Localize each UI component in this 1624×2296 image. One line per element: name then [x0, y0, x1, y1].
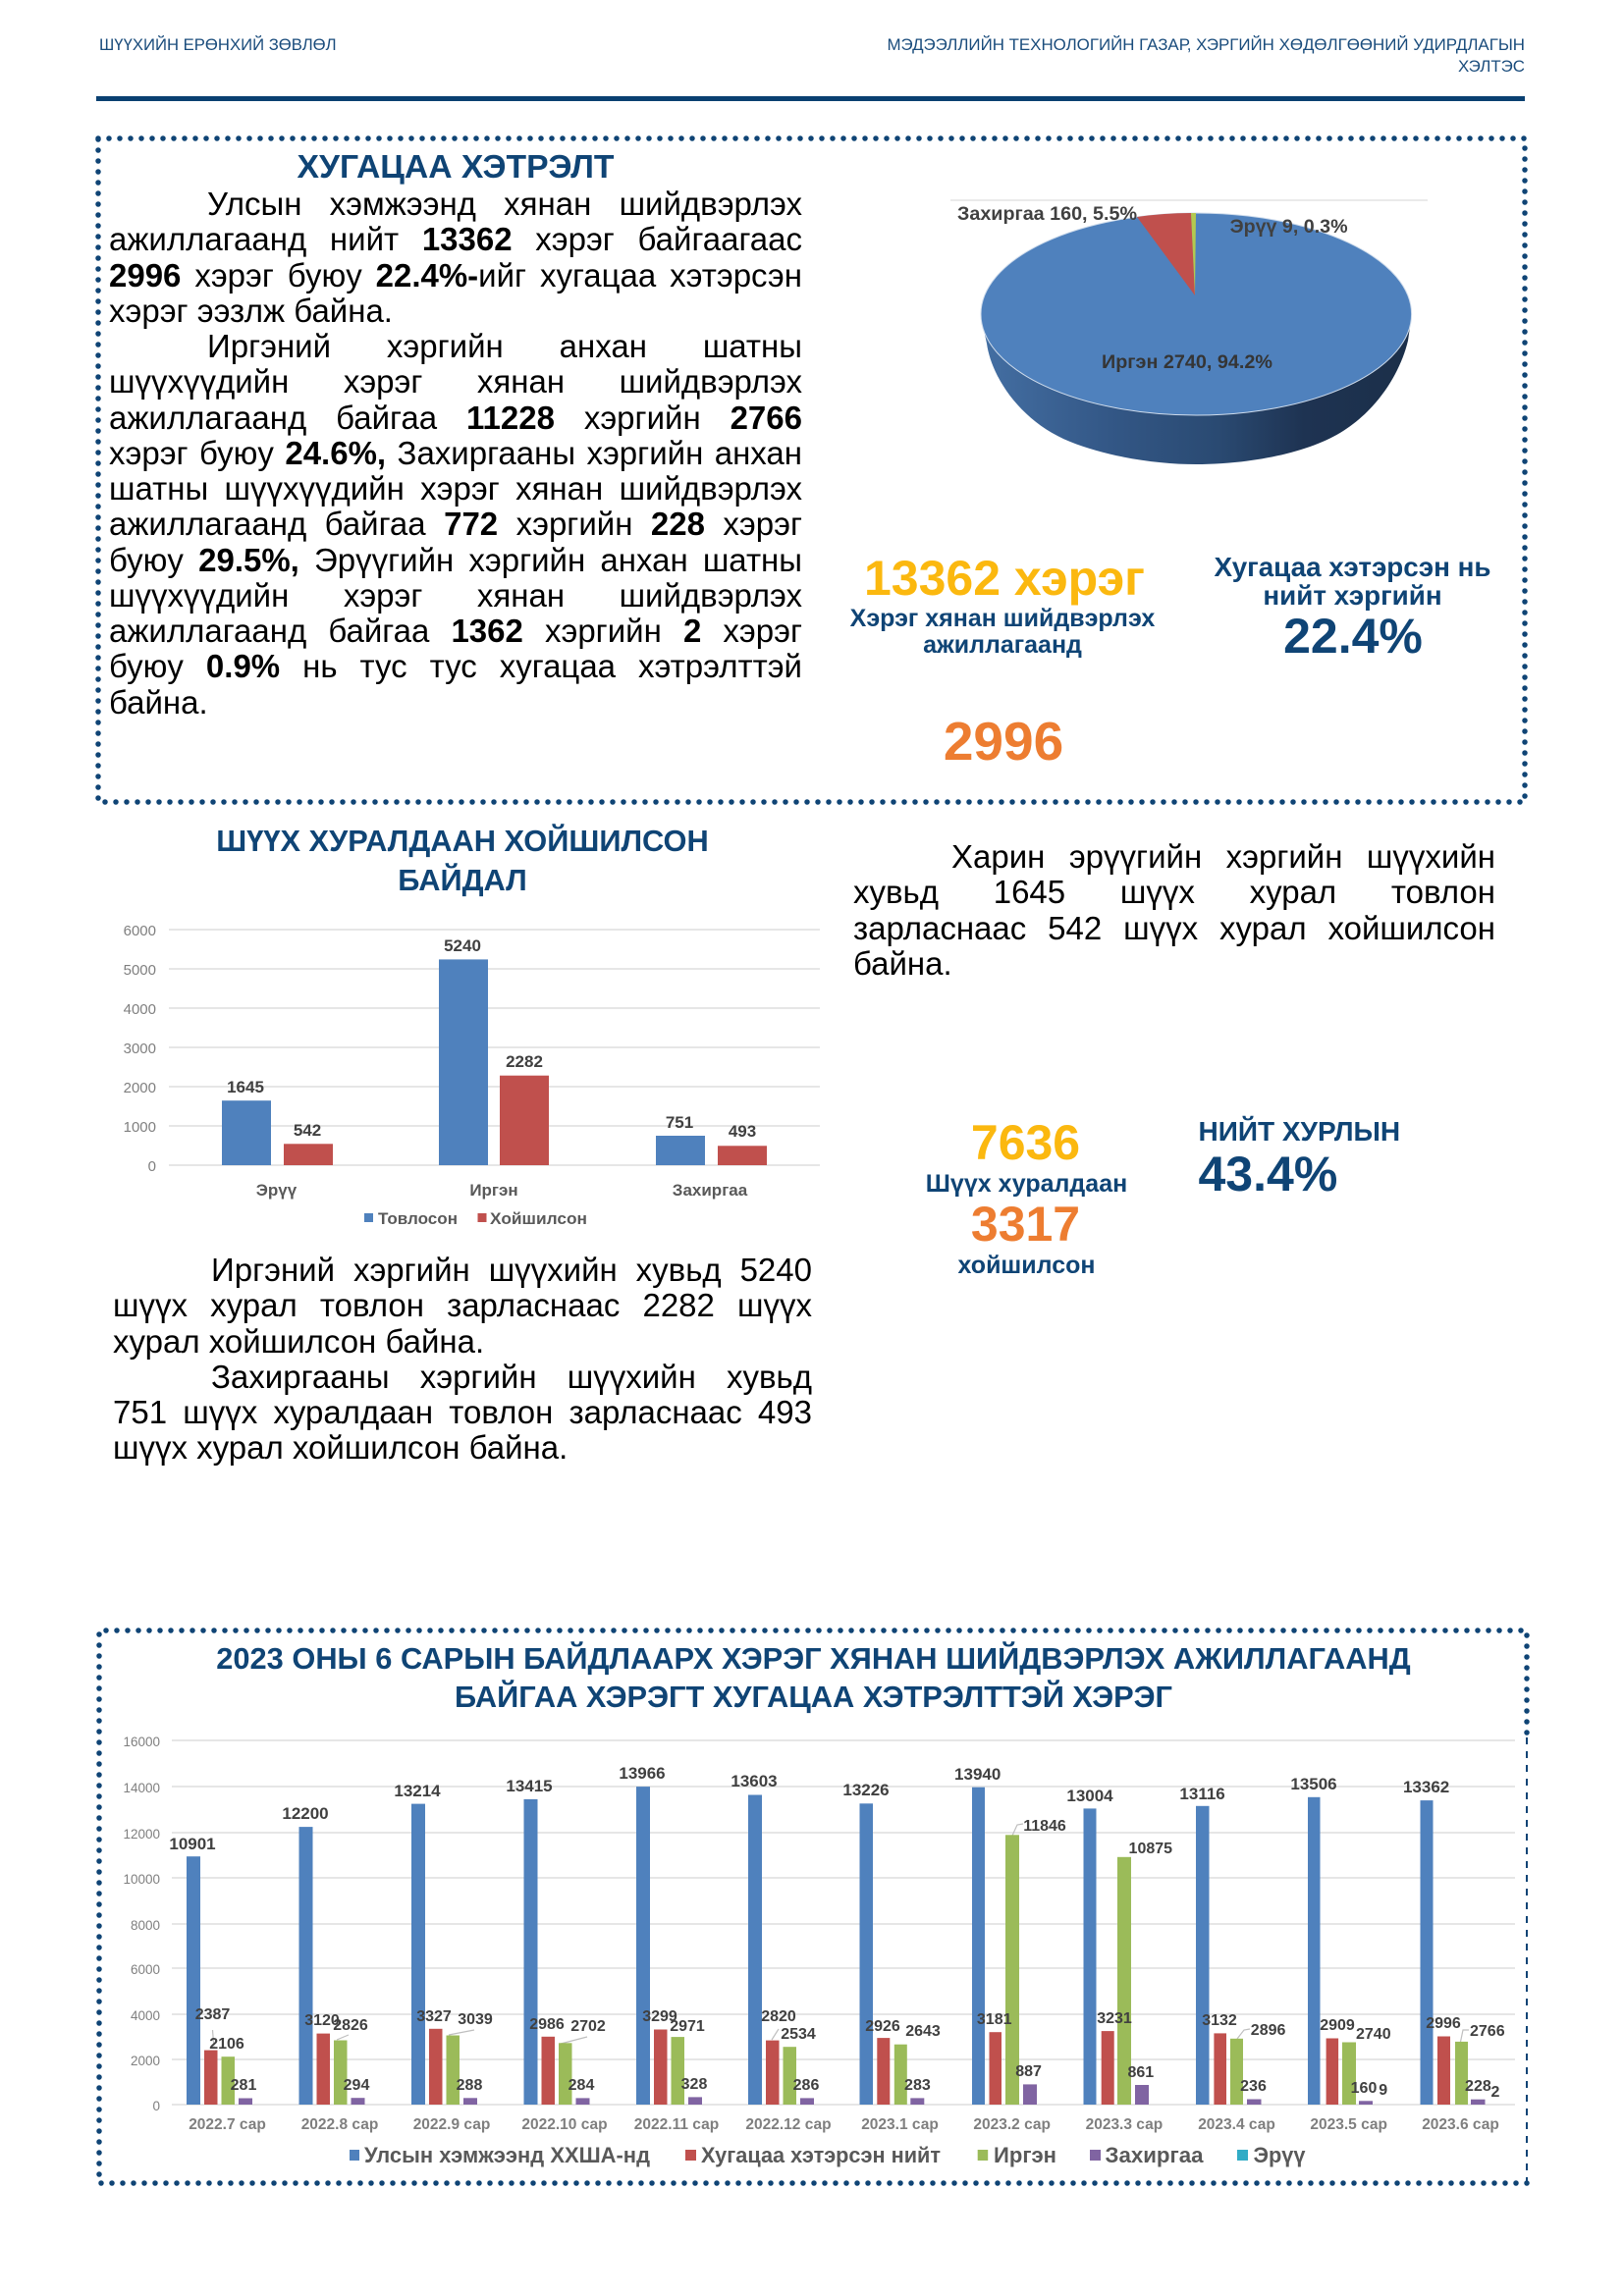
month: 2023.3: 10875: [1129, 1841, 1172, 1857]
month: 2023.5: [1290, 1775, 1391, 2133]
text block: criminal hearings: байна.: [853, 945, 952, 982]
month: 2022.11: 328: [681, 2076, 707, 2093]
bars: administrative: 751: [666, 1113, 693, 1132]
stat caption: overdue share: [1214, 552, 1490, 611]
y axis labels: 6000: [131, 1962, 160, 1977]
month: 2022.10: [506, 1777, 608, 2133]
text block: overdue description: шүүхүүдийн хэрэг хянан шийдвэрлэх: [109, 363, 802, 400]
month: 2022.9: 2022.9 сар: [413, 2116, 490, 2133]
header rule: [96, 96, 1525, 101]
month: 2022.11: 2022.11 сар: [634, 2116, 719, 2133]
panel: overdue cases: [95, 135, 1528, 805]
text block: overdue description: буюу 0.9% нь тус тус хугацаа хэтрэлттэй: [109, 648, 802, 684]
month: 2023.4: 13116: [1179, 1785, 1225, 1803]
month: 2023.2: 2023.2 сар: [973, 2116, 1051, 2133]
text block: criminal hearings: Харин эрүүгийн хэргийн шүүхийн: [951, 838, 1495, 875]
legend: Хойшилсон: [490, 1209, 587, 1228]
month: 2023.4: 2023.4 сар: [1198, 2116, 1275, 2133]
text block: overdue description: ажиллагаанд байгаа 1362 хэргийн 2 хэрэг: [109, 613, 802, 649]
text block: overdue description: ажиллагаанд нийт 13362 хэрэг байгаагаас: [109, 221, 802, 257]
text block: overdue description: Иргэний хэргийн анхан шатны: [207, 328, 802, 364]
month: 2022.9: 3327: [416, 2008, 452, 2025]
stat caption: overdue share: Хугацаа хэтэрсэн нь: [1215, 552, 1490, 581]
month: 2022.10: 2022.10 сар: [521, 2116, 608, 2133]
stat caption: overdue share: нийт хэргийн: [1263, 579, 1442, 611]
month: 2022.9: 3039: [458, 2011, 493, 2028]
text block: civil and administrative hearings: Иргэний хэргийн шүүхийн хувьд 5240: [211, 1252, 812, 1288]
month: 2022.11: 13966: [619, 1764, 666, 1783]
stat caption: total cases: Хэрэг хянан шийдвэрлэх: [850, 605, 1155, 632]
stat caption: total hearings: НИЙТ ХУРЛЫН: [1198, 1116, 1400, 1147]
bars: civil: 5240: [444, 936, 481, 955]
leader lines: [212, 1824, 1469, 2049]
y axis labels: 14000: [123, 1781, 160, 1795]
text block: civil and administrative hearings: шүүх хурал товлон зарласнаас 2282 шүүх: [113, 1287, 812, 1323]
month: 2023.6: 2766: [1470, 2023, 1505, 2040]
text block: overdue description: буюу 29.5%, Эрүүгийн хэргийн анхан шатны: [109, 542, 802, 577]
bars: civil: Иргэн: [469, 1181, 518, 1200]
bars: criminal: [222, 1078, 333, 1200]
bars: criminal: 1645: [227, 1078, 264, 1096]
legend: Захиргаа: [1106, 2143, 1204, 2167]
month: 2023.4: 3132: [1202, 2012, 1237, 2029]
legend: Иргэн: [994, 2143, 1056, 2167]
bars: administrative: Захиргаа: [673, 1181, 748, 1200]
text block: criminal hearings: хувьд 1645 шүүх хурал товлон: [853, 874, 1495, 910]
month: 2022.10: 13415: [506, 1777, 553, 1795]
month: 2022.8: 294: [344, 2077, 369, 2094]
month: 2022.12: 286: [793, 2077, 819, 2094]
y axis labels: 5000: [124, 962, 156, 979]
month: 2022.10: 284: [568, 2077, 594, 2094]
month: 2023.6: [1403, 1778, 1505, 2133]
y axis labels: 0: [152, 2099, 160, 2113]
bars: civil: 2282: [506, 1052, 543, 1071]
heading: overdue: ХУГАЦАА ХЭТРЭЛТ: [298, 148, 614, 186]
month: 2022.8: 2022.8 сар: [301, 2116, 378, 2133]
legend: Улсын хэмжээнд ХХША-нд: [364, 2143, 650, 2167]
stat: total cases: 13362 хэрэг: [864, 550, 1145, 605]
header: organisation name: ШҮҮХИЙН ЕРӨНХИЙ ЗӨВЛӨЛ: [99, 35, 337, 54]
text block: overdue description: 2996 хэрэг буюу 22.4%-ийг хугацаа хэтэрсэн: [109, 257, 802, 293]
month: 2022.10: 2986: [529, 2016, 565, 2033]
month: 2022.7: 2022.7 сар: [189, 2116, 266, 2133]
stat caption: total cases: [850, 605, 1155, 658]
text block: civil and administrative hearings: 751 шүүх хуралдаан товлон зарласнаас 493: [113, 1394, 812, 1430]
pie label: civil: Иргэн 2740, 94.2%: [1102, 352, 1272, 373]
y axis labels: 2000: [124, 1080, 156, 1096]
heading: monthly overdue trend: БАЙГАА ХЭРЭГТ ХУГАЦАА ХЭТРЭЛТТЭЙ ХЭРЭГ: [455, 1679, 1172, 1714]
bars: administrative: [656, 1113, 767, 1200]
month: 2022.9: 288: [457, 2077, 482, 2094]
month: 2023.1: 2643: [905, 2023, 941, 2040]
month: 2023.1: 2926: [865, 2018, 900, 2035]
month: 2023.5: 2023.5 сар: [1310, 2116, 1387, 2133]
month: 2023.4: [1179, 1785, 1285, 2133]
legend: Эрүү: [1253, 2143, 1306, 2167]
text block: overdue description: хэрэг ээзлж байна.: [109, 293, 393, 329]
header: department name: МЭДЭЭЛЛИЙН ТЕХНОЛОГИЙН ГАЗАР, ХЭРГИЙН ХӨДӨЛГӨӨНИЙ УДИРДЛАГЫН ХЭЛТЭС: [887, 35, 1525, 76]
month: 2023.6: 2996: [1426, 2015, 1461, 2032]
stat caption: scheduled hearings: Шүүх хуралдаан: [926, 1170, 1127, 1198]
text block: overdue description: шатны шүүхүүдийн хэрэг хянан шийдвэрлэх: [109, 470, 802, 507]
y axis labels: 0: [148, 1158, 156, 1175]
text block: criminal hearings: [853, 838, 1495, 982]
month: 2022.12: 2534: [781, 2026, 816, 2043]
month: 2023.3: [1066, 1787, 1172, 2133]
bar chart: scheduled vs postponed hearings: [124, 923, 820, 1228]
bar chart: monthly overdue cases: [123, 1735, 1515, 2167]
text block: civil and administrative hearings: Захиргааны хэргийн шүүхийн хувьд: [211, 1359, 812, 1395]
month: 2023.6: 228: [1465, 2078, 1491, 2095]
y axis labels: 4000: [131, 2008, 160, 2023]
month: 2022.7: 281: [231, 2077, 256, 2094]
heading: monthly overdue trend: [216, 1641, 1411, 1714]
month: 2022.12: 13603: [731, 1772, 778, 1790]
legend: [350, 2143, 1306, 2167]
bars: administrative: 493: [729, 1122, 756, 1141]
month: 2023.1: 283: [904, 2077, 931, 2094]
month: 2022.7: 2106: [209, 2036, 244, 2053]
month: 2022.12: 2820: [761, 2008, 796, 2025]
text block: overdue description: ажиллагаанд байгаа 772 хэргийн 228 хэрэг: [109, 506, 802, 542]
y axis labels: 4000: [124, 1001, 156, 1018]
month: 2022.11: 2971: [670, 2018, 705, 2035]
stat caption: total cases: ажиллагаанд: [923, 630, 1082, 658]
month: 2023.4: 236: [1240, 2078, 1267, 2095]
month: 2023.6: 2: [1491, 2084, 1500, 2101]
stat: scheduled hearings: 7636: [971, 1115, 1080, 1170]
stat: overdue share: 22.4%: [1283, 609, 1423, 664]
text block: overdue description: ажиллагаанд байгаа 11228 хэргийн 2766: [109, 399, 802, 436]
y axis labels: 16000: [123, 1735, 160, 1749]
month: 2022.8: 3120: [304, 2012, 340, 2029]
y axis labels: 12000: [123, 1827, 160, 1842]
month: 2023.5: 2909: [1320, 2017, 1355, 2034]
month: 2022.12: [731, 1772, 832, 2133]
month: 2023.5: 2740: [1356, 2026, 1391, 2043]
stat: postponed hearings: 3317: [971, 1196, 1080, 1251]
pie label: criminal: Эрүү 9, 0.3%: [1230, 217, 1348, 238]
month: 2022.7: 2387: [195, 2006, 230, 2023]
month: 2023.3: 2023.3 сар: [1086, 2116, 1163, 2133]
month: 2023.4: 2896: [1251, 2022, 1285, 2039]
month: 2023.2: 11846: [1023, 1818, 1066, 1835]
month: 2023.6: 13362: [1403, 1778, 1449, 1796]
month: 2022.7: 10901: [169, 1835, 216, 1853]
month: 2022.8: 2826: [333, 2017, 368, 2034]
y axis labels: 2000: [131, 2054, 160, 2068]
text block: overdue description: шүүхүүдийн хэрэг хянан шийдвэрлэх: [109, 577, 802, 614]
bars: criminal: Эрүү: [256, 1181, 298, 1200]
text block: civil and administrative hearings: шүүх хурал хойшилсон байна.: [113, 1429, 568, 1466]
month: 2022.9: 13214: [394, 1782, 441, 1800]
month: 2023.2: 3181: [977, 2011, 1012, 2028]
y axis labels: [124, 923, 156, 1175]
heading: monthly overdue trend: 2023 ОНЫ 6 САРЫН БАЙДЛААРХ ХЭРЭГ ХЯНАН ШИЙДВЭРЛЭХ АЖИЛЛАГААНД: [216, 1641, 1411, 1675]
heading: postponed hearings: ШҮҮХ ХУРАЛДААН ХОЙШИЛСОН: [216, 824, 709, 858]
heading: postponed hearings: БАЙДАЛ: [398, 863, 527, 897]
legend: [364, 1209, 587, 1228]
month: 2022.7: [169, 1835, 266, 2133]
month: 2023.2: 887: [1015, 2063, 1042, 2080]
bars: civil: [439, 936, 549, 1200]
y axis labels: 6000: [124, 923, 156, 939]
month: 2022.9: [394, 1782, 493, 2133]
month: 2023.1: [842, 1781, 941, 2133]
month: 2023.5: 13506: [1290, 1775, 1337, 1793]
month: 2023.3: 13004: [1066, 1787, 1113, 1805]
month: 2022.10: 2702: [570, 2018, 606, 2035]
month: 2023.6: 2023.6 сар: [1422, 2116, 1499, 2133]
y axis labels: [123, 1735, 160, 2113]
month: 2022.8: [282, 1804, 378, 2133]
text block: overdue description: Улсын хэмжээнд хянан шийдвэрлэх: [207, 186, 802, 222]
month: 2023.3: 3231: [1097, 2010, 1132, 2027]
month: 2023.5: 160: [1351, 2080, 1377, 2097]
y axis labels: 1000: [124, 1119, 156, 1136]
stat: overdue cases: 2996: [944, 711, 1063, 772]
text block: criminal hearings: зарласнаас 542 шүүх хурал хойшилсон: [853, 909, 1495, 946]
month: 2022.8: 12200: [282, 1804, 329, 1823]
month: 2023.2: 13940: [954, 1765, 1001, 1784]
panel: monthly overdue trend: [96, 1628, 1530, 2186]
month: 2023.1: 2023.1 сар: [861, 2116, 939, 2133]
bars: criminal: 542: [294, 1121, 321, 1140]
text block: civil and administrative hearings: хурал хойшилсон байна.: [113, 1323, 484, 1359]
pie label: administrative: Захиргаа 160, 5.5%: [957, 204, 1137, 225]
text block: overdue description: [109, 186, 802, 721]
pie chart: overdue by case type: [950, 199, 1428, 464]
y axis labels: 10000: [123, 1872, 160, 1887]
month: 2022.11: 3299: [642, 2008, 677, 2025]
heading: postponed hearings: [216, 824, 709, 897]
month: 2022.11: [619, 1764, 719, 2133]
text block: overdue description: байна.: [109, 683, 208, 721]
legend: Хугацаа хэтэрсэн нийт: [701, 2143, 941, 2167]
text block: civil and administrative hearings: [113, 1252, 812, 1466]
month: 2023.5: 9: [1379, 2082, 1387, 2099]
stat caption: postponed hearings: хойшилсон: [958, 1251, 1095, 1278]
y axis labels: 3000: [124, 1041, 156, 1057]
month: 2023.2: [954, 1765, 1066, 2133]
month: 2023.3: 861: [1127, 2064, 1154, 2081]
month: 2023.1: 13226: [842, 1781, 890, 1799]
text block: overdue description: хэрэг буюу 24.6%, Захиргааны хэргийн анхан: [109, 435, 802, 471]
month: 2022.12: 2022.12 сар: [745, 2116, 832, 2133]
y axis labels: 8000: [131, 1918, 160, 1933]
stat: postponed share: 43.4%: [1198, 1147, 1337, 1201]
legend: Товлосон: [378, 1209, 458, 1228]
